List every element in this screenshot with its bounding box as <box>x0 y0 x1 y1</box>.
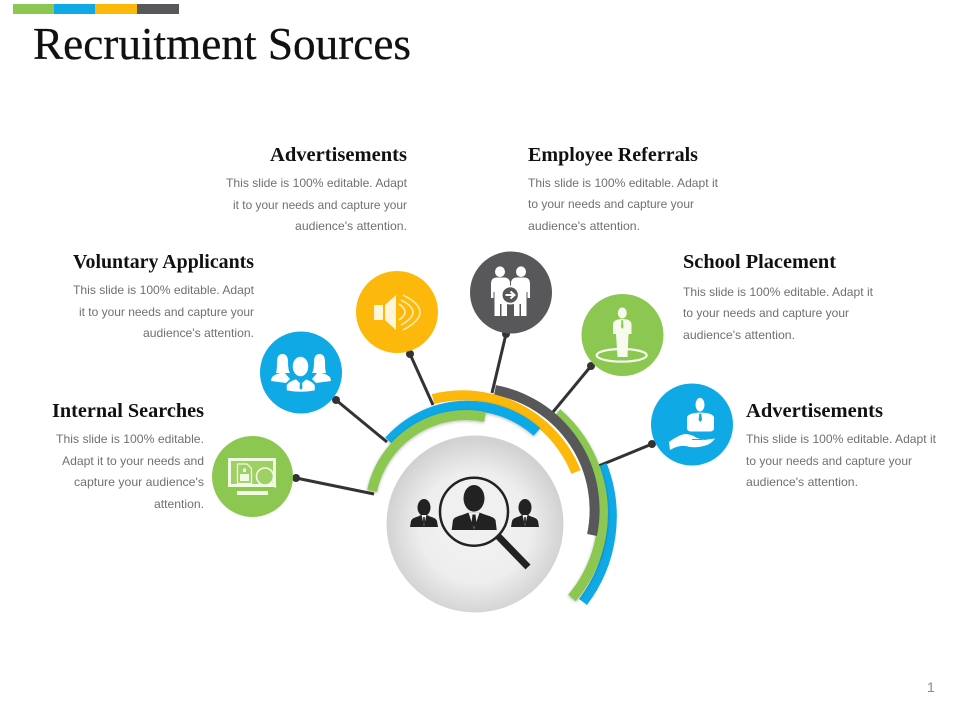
title: Recruitment Sources <box>33 18 411 69</box>
text block: school placement: This slide is 100% editable. Adapt it <box>683 285 874 299</box>
icon: voluntary applicants group <box>260 332 342 414</box>
text block: advertisements top: This slide is 100% editable. Adapt <box>226 176 408 190</box>
icon: left person <box>410 499 438 527</box>
text block: advertisements top: Advertisements <box>270 145 407 166</box>
icon: advertisements hand with person <box>651 384 733 466</box>
text block: advertisements top: audience's attention. <box>295 219 407 233</box>
text block: employee referrals: Employee Referrals <box>528 145 698 166</box>
text block: internal searches: attention. <box>154 497 204 511</box>
text block: advertisements right <box>746 401 937 489</box>
text block: advertisements top: it to your needs and capture your <box>233 198 407 212</box>
text block: school placement <box>683 252 874 342</box>
icon: right person <box>511 499 539 527</box>
text block: voluntary applicants <box>73 252 255 340</box>
text block: voluntary applicants: audience's attention. <box>143 326 254 340</box>
text block: advertisements right: to your needs and capture your <box>746 454 912 468</box>
text block: internal searches: capture your audience's <box>74 475 204 489</box>
text block: internal searches: Internal Searches <box>52 401 204 422</box>
text block: advertisements right: Advertisements <box>746 401 883 422</box>
text block: school placement: audience's attention. <box>683 328 795 342</box>
icon: school placement person <box>582 294 664 376</box>
text block: advertisements right: audience's attention. <box>746 475 858 489</box>
text block: employee referrals: to your needs and capture your <box>528 197 694 211</box>
text block: voluntary applicants: Voluntary Applicants <box>73 252 254 273</box>
text block: employee referrals <box>528 145 719 233</box>
icon: magnifier with central person <box>440 478 528 567</box>
central sphere with magnifier and people <box>386 436 564 612</box>
connector lines <box>292 330 656 494</box>
text block: advertisements right: This slide is 100% editable. Adapt it <box>746 432 937 446</box>
text block: employee referrals: audience's attention. <box>528 219 640 233</box>
text block: voluntary applicants: it to your needs and capture your <box>79 305 254 319</box>
text block: voluntary applicants: This slide is 100% editable. Adapt <box>73 283 255 297</box>
text block: advertisements top <box>226 145 408 233</box>
text block: employee referrals: This slide is 100% editable. Adapt it <box>528 176 719 190</box>
icon: advertisements speaker <box>356 271 438 353</box>
text block: school placement: School Placement <box>683 252 837 273</box>
concentric arcs <box>372 390 612 602</box>
icon: employee referrals pair <box>470 252 552 334</box>
accent bar <box>13 4 179 14</box>
text block: school placement: to your needs and capture your <box>683 306 849 320</box>
icon: internal searches monitor <box>212 436 293 517</box>
text block: internal searches: This slide is 100% editable. <box>56 432 204 446</box>
page number: 1 <box>927 679 935 695</box>
text block: internal searches: Adapt it to your needs and <box>62 454 204 468</box>
text block: internal searches <box>52 401 204 511</box>
